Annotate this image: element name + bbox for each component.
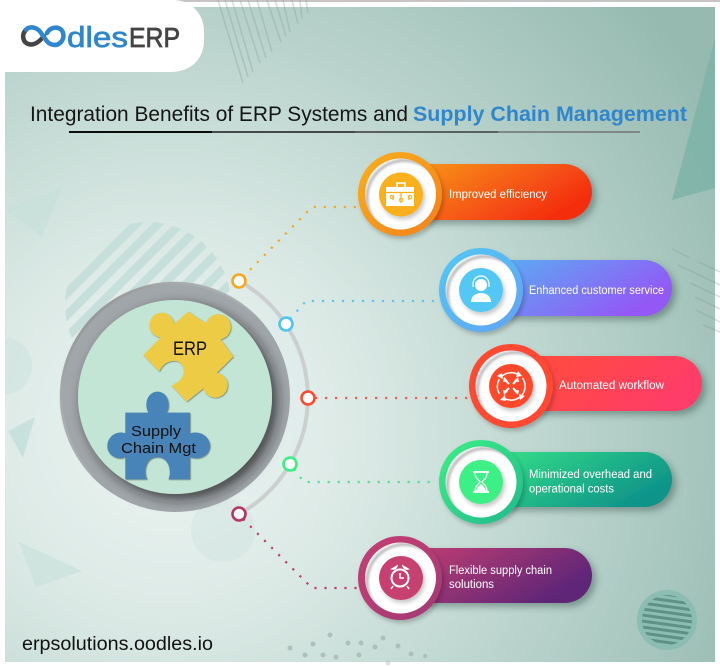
label: Enhanced customer service: [529, 285, 664, 297]
icon: customer service agent: [459, 268, 503, 312]
logo wordmark dles: dles: [67, 22, 128, 54]
label: operational costs: [529, 484, 614, 496]
central hub circle: [60, 282, 290, 512]
logo wordmark ERP: ERP: [129, 22, 180, 53]
title underline: [69, 131, 640, 133]
timeline nodes: [232, 274, 314, 520]
title: Supply Chain Management: [413, 102, 687, 126]
logo: [0, 0, 204, 72]
label: Flexible supply chain: [449, 565, 552, 577]
panel: improved efficiency: [358, 152, 592, 236]
panel: minimized overhead and operational costs: [439, 440, 672, 524]
puzzle piece: Supply Chain Mgt: Supply: [131, 423, 182, 440]
dotted connectors: [243, 207, 468, 588]
label: solutions: [449, 579, 494, 591]
label: Automated workflow: [559, 380, 665, 392]
icon: workflow arrows: [489, 364, 533, 408]
title: Integration Benefits of ERP Systems and: [30, 102, 408, 126]
title: [30, 102, 687, 126]
footer website url: erpsolutions.oodles.io: [22, 634, 213, 655]
icon: toolbox: [379, 172, 423, 216]
panel: flexible supply chain solutions: [358, 536, 592, 620]
puzzle piece: Supply Chain Mgt: [107, 392, 210, 479]
puzzle piece: Supply Chain Mgt: Chain Mgt: [121, 440, 197, 457]
label: Improved efficiency: [449, 189, 547, 201]
timeline arc: [239, 281, 308, 514]
label: Minimized overhead and: [529, 469, 652, 481]
puzzle piece: ERP: [143, 312, 233, 402]
inner disc: [78, 300, 272, 494]
icon: hourglass: [459, 460, 503, 504]
puzzle piece: ERP: ERP: [173, 339, 207, 360]
icon: alarm clock: [379, 556, 423, 600]
panel: automated workflow: [469, 344, 702, 428]
panel: enhanced customer service: [439, 248, 672, 332]
logo infinity mark: [23, 27, 63, 45]
